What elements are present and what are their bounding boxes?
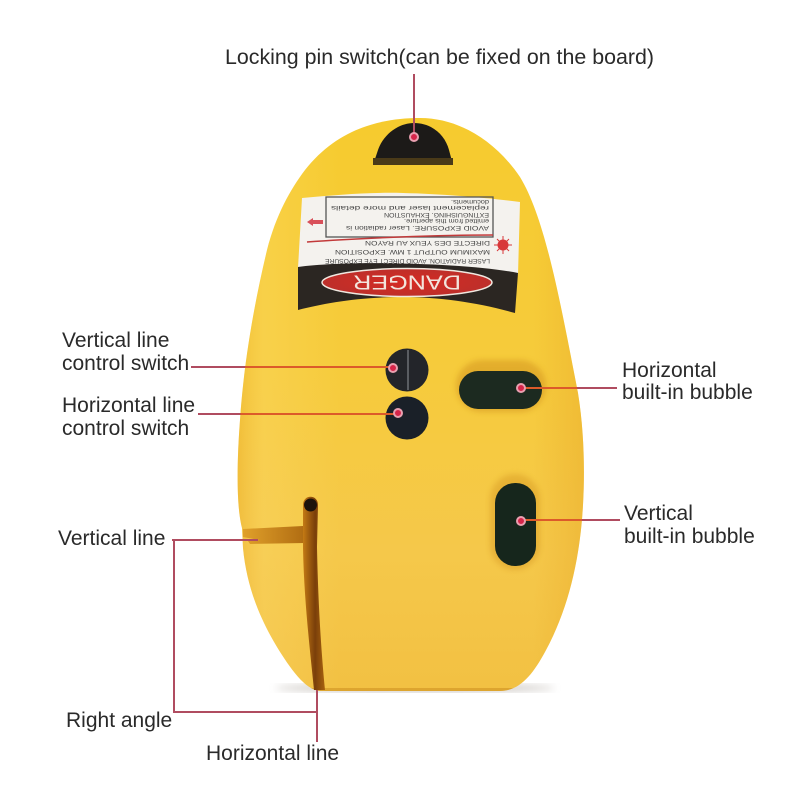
- label fine print: emitted from this aperture.: [404, 217, 489, 223]
- label: vertical line: Vertical line: [58, 527, 165, 550]
- label fine print: LASER RADIATION. AVOID DIRECT EYE EXPOSURE: [325, 257, 490, 263]
- label: vertical line control switch: control switch: [62, 352, 189, 375]
- product: laser level body: [230, 110, 590, 700]
- label: locking pin switch: Locking pin switch(can be fixed on the board): [225, 46, 654, 69]
- label fine print: MAXIMUM OUTPUT 1 MW. EXPOSITION: [335, 248, 490, 254]
- arrow: [307, 218, 323, 226]
- vertical line control knob: [386, 348, 428, 392]
- label: vertical bubble: built-in bubble: [624, 525, 755, 548]
- vertical bubble: [490, 474, 540, 570]
- label: horizontal line control switch: Horizontal line: [62, 394, 195, 417]
- label fine print: DIRECTE DES YEUX AU RAYON: [365, 239, 490, 245]
- label: horizontal line: Horizontal line: [206, 742, 339, 765]
- label: vertical line control switch: Vertical line: [62, 329, 169, 352]
- danger text: DANGER: [353, 270, 461, 292]
- laser slot: [243, 497, 325, 690]
- horizontal bubble: [456, 360, 546, 412]
- label fine print: replacement laser and more details: [331, 204, 489, 210]
- callout lines over body: [240, 366, 582, 521]
- callout dots: [389, 133, 525, 525]
- label fine print: AVOID EXPOSURE. Laser radiation is: [346, 224, 489, 230]
- locking pin switch: [373, 123, 453, 165]
- label: horizontal line control switch: control switch: [62, 417, 189, 440]
- label fine print: EXTINGUISHING. EXHAUSTION: [384, 211, 489, 217]
- callout lines: [172, 74, 620, 742]
- warning label: [298, 193, 520, 313]
- label: right angle: Right angle: [66, 709, 172, 732]
- label: vertical bubble: Vertical: [624, 502, 693, 525]
- label: horizontal bubble: Horizontal: [622, 359, 717, 382]
- label: horizontal bubble: built-in bubble: [622, 381, 753, 404]
- label fine print: [325, 198, 490, 263]
- horizontal line control knob: [386, 396, 428, 440]
- label fine print: documents.: [451, 198, 489, 204]
- laser star: [494, 236, 512, 254]
